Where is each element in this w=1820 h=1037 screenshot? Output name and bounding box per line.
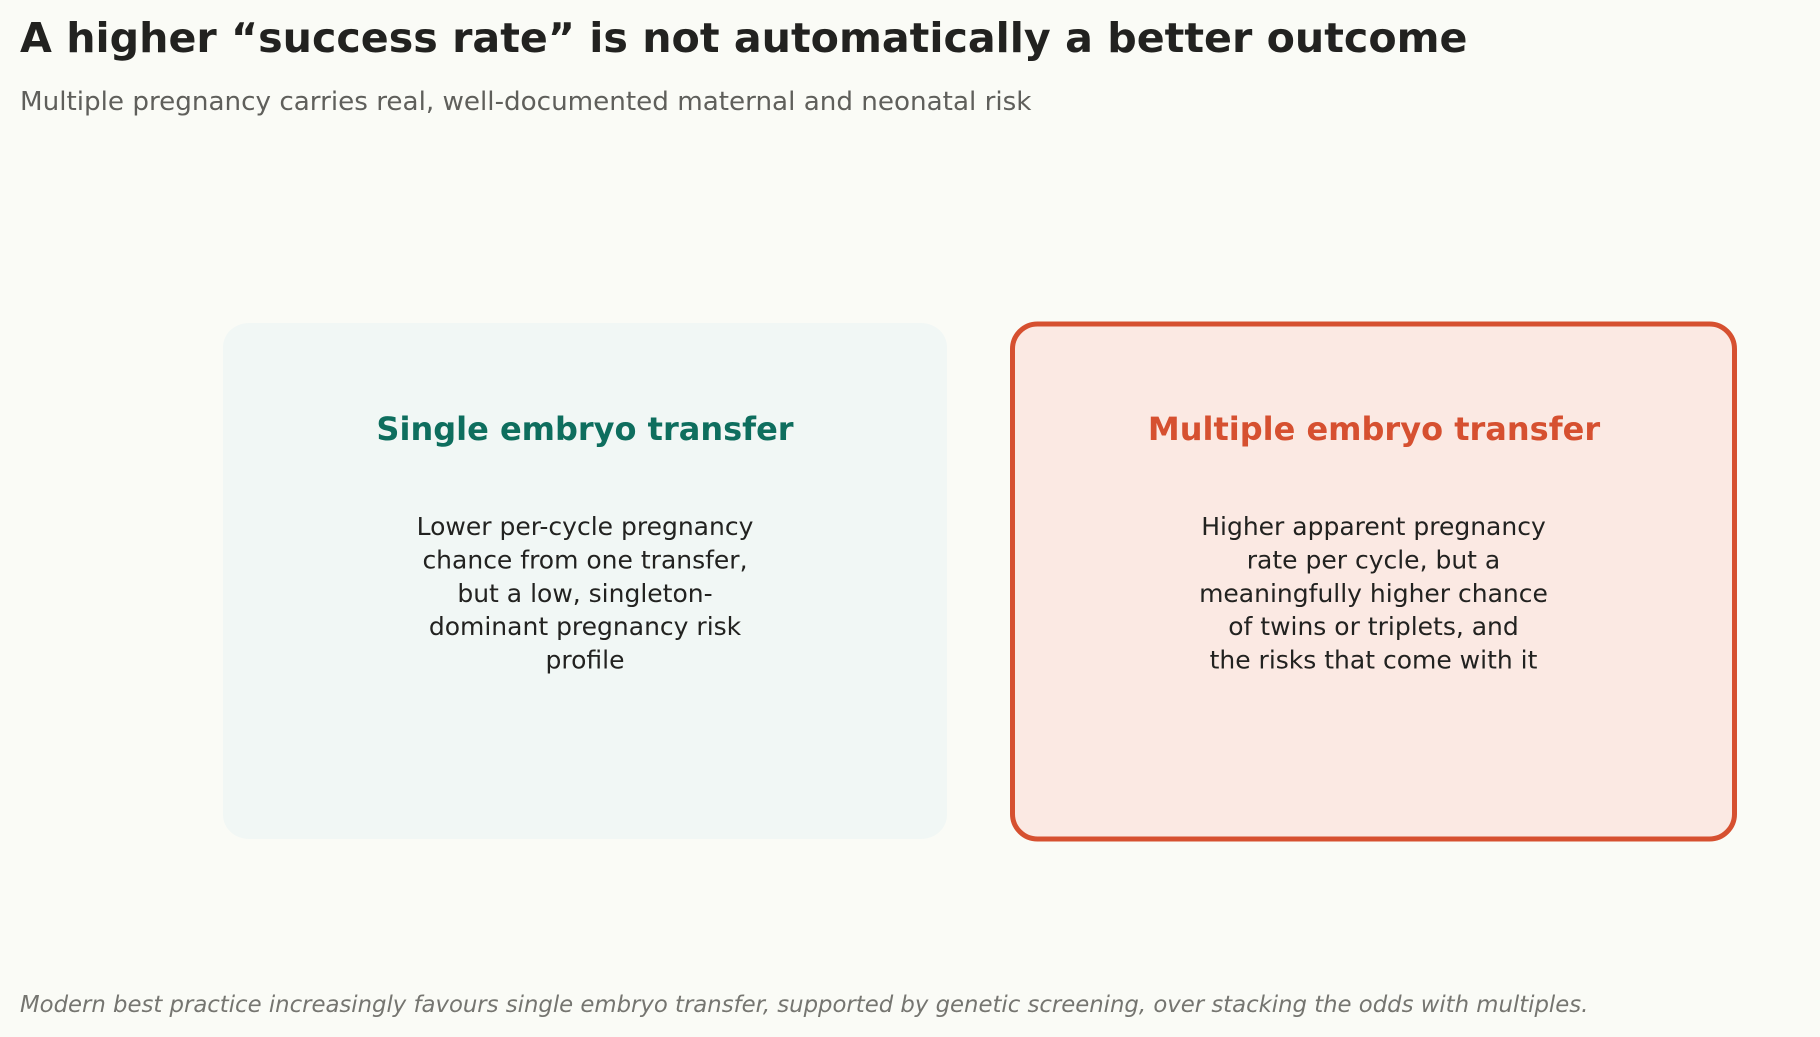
heading: single embryo transfer: Single embryo transfer: [376, 410, 794, 448]
text block: multiple embryo description: [1199, 512, 1548, 675]
text block: multiple embryo description: meaningfully higher chance: [1199, 579, 1548, 608]
text block: multiple embryo description: rate per cycle, but a: [1247, 545, 1500, 574]
text block: single embryo description: but a low, singleton-: [457, 579, 713, 608]
panel: multiple embryo transfer: [1012, 324, 1734, 839]
panel background: single: [223, 323, 947, 839]
text block: multiple embryo description: Higher apparent pregnancy: [1201, 512, 1546, 541]
text block: single embryo description: [417, 512, 754, 675]
text block: multiple embryo description: of twins or triplets, and: [1228, 612, 1519, 641]
subtitle: Multiple pregnancy carries real, well-documented maternal and neonatal risk: [20, 87, 1032, 117]
panel: single embryo transfer: [223, 323, 947, 839]
text block: single embryo description: dominant pregnancy risk: [429, 612, 742, 641]
footnote: Modern best practice increasingly favours single embryo transfer, supported by genetic screening, over stacking the odds with multiples.: [20, 992, 1588, 1018]
panel background: multiple: [1012, 324, 1734, 839]
text block: single embryo description: chance from one transfer,: [422, 545, 748, 574]
heading: multiple embryo transfer: Multiple embryo transfer: [1148, 410, 1600, 448]
title: A higher “success rate” is not automatically a better outcome: [20, 14, 1467, 62]
text block: multiple embryo description: the risks that come with it: [1210, 646, 1538, 675]
text block: single embryo description: Lower per-cycle pregnancy: [417, 512, 754, 541]
text block: single embryo description: profile: [546, 646, 624, 675]
